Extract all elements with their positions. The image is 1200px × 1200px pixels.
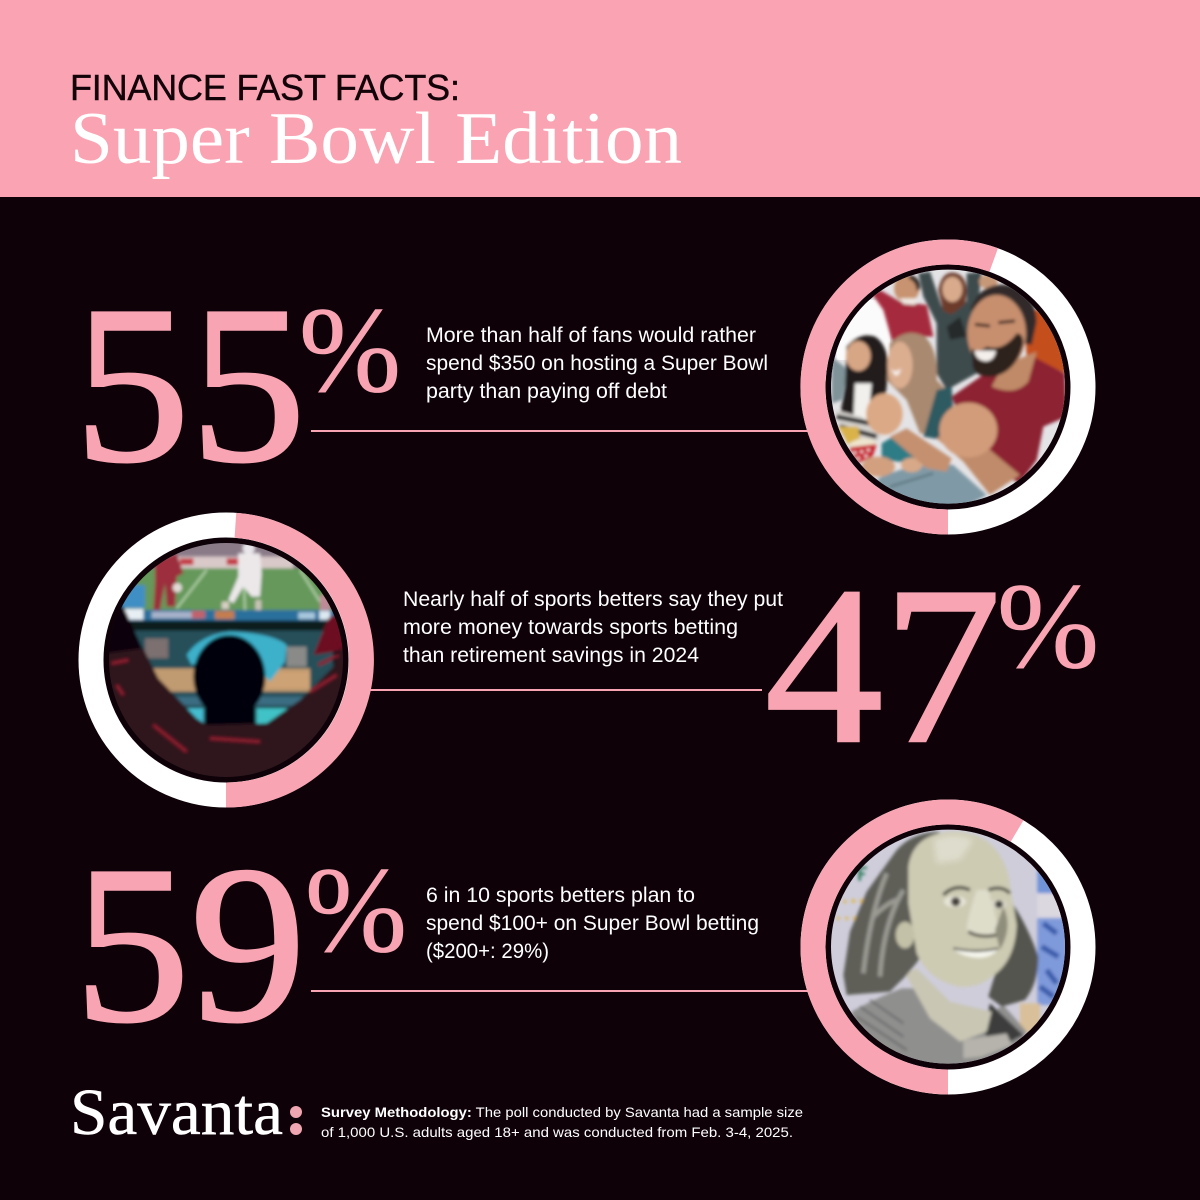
big number 55%: 55 xyxy=(74,259,306,509)
description text: spend $100+ on Super Bowl betting xyxy=(426,912,759,935)
big number 59%: % xyxy=(305,843,407,978)
big number 47%: % xyxy=(997,559,1099,694)
title: finance fast facts: FINANCE FAST FACTS: xyxy=(70,67,460,108)
big number 47% xyxy=(765,540,1099,790)
big number 59%: 59 xyxy=(74,819,306,1069)
description text: Nearly half of sports betters say they put xyxy=(403,588,783,611)
donut ring 59% xyxy=(813,812,1083,1082)
description text xyxy=(426,884,759,963)
big number 47%: 47 xyxy=(765,540,1001,790)
features xyxy=(943,888,1010,895)
big number 55% xyxy=(74,259,401,509)
arms and shirt xyxy=(109,646,343,777)
man in red sweater xyxy=(872,290,933,345)
lower screen xyxy=(120,621,337,631)
collar and neck xyxy=(905,968,992,1042)
header band xyxy=(0,0,1200,197)
main man shirt xyxy=(952,357,1067,483)
photo: cheering fans xyxy=(831,270,1065,504)
donut ring 55% xyxy=(813,252,1083,522)
silhouette head xyxy=(193,635,265,718)
blonde woman xyxy=(887,333,953,437)
raised arm and fist xyxy=(934,434,1022,496)
description text: ($200+: 29%) xyxy=(426,940,549,963)
stands xyxy=(151,543,301,571)
left woman xyxy=(832,357,848,403)
red player xyxy=(153,553,183,610)
third head behind xyxy=(979,274,998,289)
photo: Benjamin Franklin on a $100 bill xyxy=(831,830,1065,1064)
hair xyxy=(843,832,940,995)
back wall shade xyxy=(1023,310,1067,373)
panel: 47 percent stat xyxy=(91,525,1099,805)
main man head xyxy=(970,285,1037,345)
description text: 6 in 10 sports betters plan to xyxy=(426,884,695,907)
forearms xyxy=(110,605,144,652)
logo: Savanta: Savanta xyxy=(70,1076,283,1149)
ticker bar xyxy=(120,610,337,621)
head xyxy=(908,832,1017,987)
description text: than retirement savings in 2024 xyxy=(403,644,699,667)
survey methodology note: of 1,000 U.S. adults aged 18+ and was conducted from Feb. 3-4, 2025. xyxy=(321,1124,793,1140)
coat xyxy=(850,986,1028,1064)
survey methodology note xyxy=(321,1104,803,1140)
panel: 55 percent stat xyxy=(74,252,1083,522)
big number 59% xyxy=(74,819,407,1069)
white player xyxy=(243,542,255,554)
description text xyxy=(426,324,768,403)
left hand xyxy=(862,457,895,477)
description text: spend $350 on hosting a Super Bowl xyxy=(426,352,768,375)
description text: party than paying off debt xyxy=(426,380,667,403)
blue security strip xyxy=(1035,870,1052,895)
big number 55%: % xyxy=(299,283,401,418)
field xyxy=(120,568,337,610)
photo: fan watching game on screens xyxy=(109,543,343,777)
description text: more money towards sports betting xyxy=(403,616,738,639)
footer xyxy=(70,1076,803,1149)
woman with raised arms xyxy=(918,272,982,390)
gold dots xyxy=(837,899,864,920)
survey methodology note: Survey Methodology: The poll conducted by Savanta had a sample size xyxy=(321,1104,803,1120)
title: super bowl edition: Super Bowl Edition xyxy=(70,98,682,180)
panel: 59 percent stat xyxy=(74,812,1083,1085)
description text: More than half of fans would rather xyxy=(426,324,756,347)
jeans xyxy=(877,464,987,508)
description text xyxy=(403,588,783,667)
snacks xyxy=(838,427,860,445)
donut ring 47% xyxy=(91,525,361,795)
